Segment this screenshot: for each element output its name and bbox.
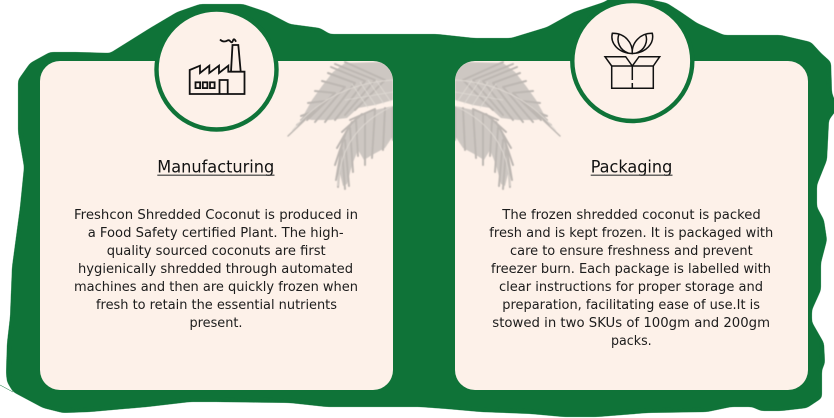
text block: manufacturing description: [74, 208, 358, 331]
heading: Packaging: Packaging: [591, 158, 672, 178]
card background: [455, 61, 808, 390]
text block: packaging description: preparation, facilitating ease of use.It is: [502, 298, 760, 313]
text block: manufacturing description: hygienically shredded through automated: [78, 262, 353, 277]
card background: [40, 61, 393, 390]
text block: packaging description: stowed in two SKUs of 100gm and 200gm: [492, 316, 770, 331]
icon: box with leaves in circle: [572, 1, 692, 121]
text block: manufacturing description: Freshcon Shredded Coconut is produced in: [74, 208, 358, 223]
text block: packaging description: The frozen shredded coconut is packed: [501, 208, 761, 223]
blob stray edge: [0, 385, 13, 392]
palm leaf decoration: [455, 62, 560, 189]
icon: factory in circle: [156, 10, 276, 130]
text block: manufacturing description: fresh to retain the essential nutrients: [96, 298, 337, 313]
text block: manufacturing description: machines and then are quickly frozen when: [74, 280, 358, 295]
text block: packaging description: packs.: [611, 334, 652, 349]
text block: packaging description: [489, 208, 773, 349]
text block: manufacturing description: quality sourced coconuts are first: [107, 244, 326, 259]
panel: packaging: [455, 1, 808, 390]
text block: packaging description: fresh and is kept frozen. It is packaged with: [489, 226, 773, 241]
text block: packaging description: freezer burn. Each package is labelled with: [491, 262, 771, 277]
palm leaf decoration: [288, 62, 393, 189]
panel: manufacturing: [40, 10, 393, 390]
heading: Manufacturing: Manufacturing: [157, 158, 274, 178]
text block: packaging description: care to ensure freshness and prevent: [510, 244, 753, 259]
text block: manufacturing description: present.: [190, 316, 242, 331]
text block: packaging description: clear instructions for proper storage and: [499, 280, 763, 295]
text block: manufacturing description: a Food Safety certified Plant. The high-: [88, 226, 344, 241]
